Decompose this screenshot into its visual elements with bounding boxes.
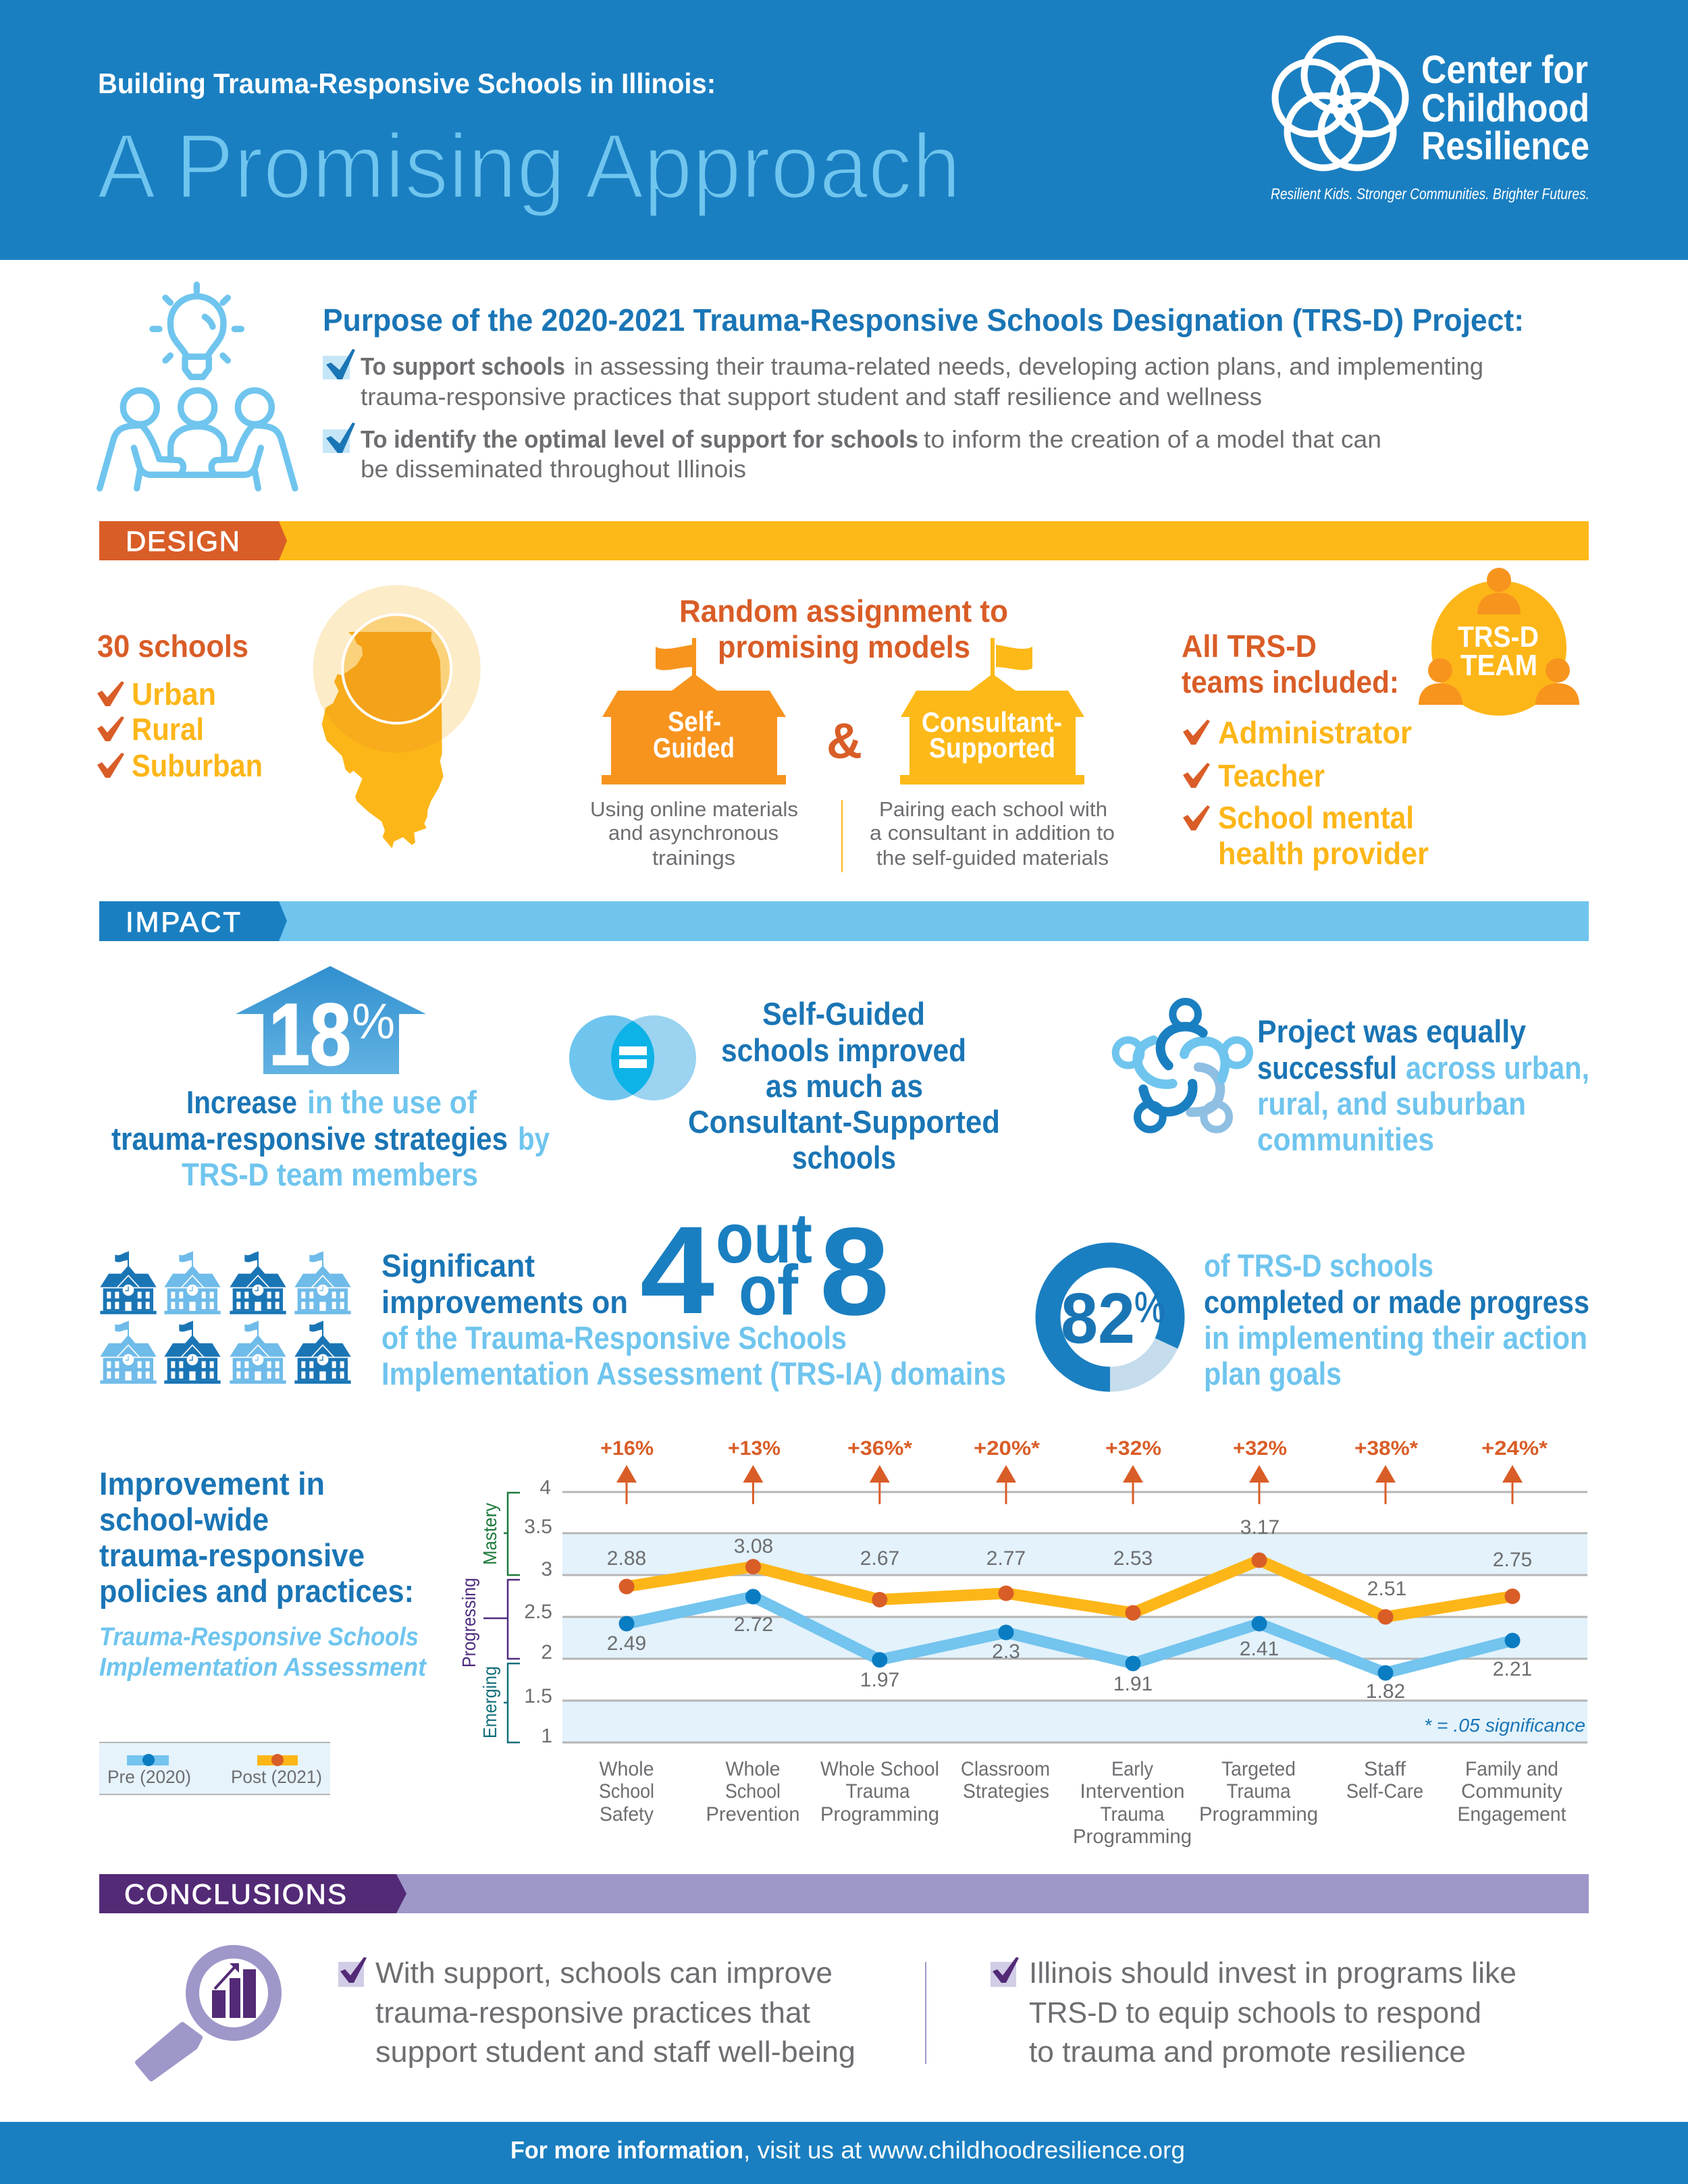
legend: Post (2021) bbox=[231, 1767, 322, 1787]
level brackets bbox=[483, 1493, 520, 1742]
x axis labels: Intervention bbox=[1080, 1780, 1184, 1803]
label: rural: Rural bbox=[132, 712, 204, 747]
icon: self-guided school bbox=[602, 638, 786, 784]
x axis labels: Safety bbox=[600, 1803, 654, 1826]
y axis labels bbox=[524, 1476, 552, 1747]
x axis labels: School bbox=[599, 1780, 654, 1803]
big stat: 4 out of 8: of bbox=[739, 1251, 799, 1330]
icon: consultant-supported school bbox=[900, 638, 1084, 784]
label: emerging: Emerging bbox=[479, 1666, 500, 1738]
x axis labels: Trauma bbox=[1101, 1803, 1165, 1826]
heading: random assignment bbox=[679, 593, 1008, 664]
y axis labels: 3 bbox=[541, 1558, 552, 1580]
label: consultant-supported: Consultant- bbox=[922, 706, 1062, 738]
section bar: impact bbox=[99, 901, 1589, 941]
logo wordmark: Resilience bbox=[1421, 124, 1589, 168]
label: consultant-supported bbox=[922, 706, 1062, 764]
consultant-supported description: the self-guided materials bbox=[876, 846, 1109, 870]
markers: post bbox=[618, 1553, 1521, 1624]
big stat: 4 out of 8: out bbox=[716, 1199, 812, 1278]
subheading: assessment name: Trauma-Responsive Schools bbox=[99, 1623, 419, 1651]
text: of schools completed: completed or made progress bbox=[1204, 1284, 1589, 1320]
heading: random assignment: Random assignment to bbox=[679, 593, 1008, 629]
purpose heading: Purpose of the 2020-2021 Trauma-Responsive Schools Designation (TRS-D) Project: bbox=[323, 302, 1524, 338]
icon: lightbulb over team meeting bbox=[100, 285, 295, 488]
panel: purpose bbox=[100, 285, 1524, 488]
data labels: pre bbox=[607, 1614, 1532, 1703]
text: project equally successful: Project was equally bbox=[1257, 1013, 1526, 1049]
label: mastery: Mastery bbox=[479, 1503, 500, 1565]
percent change labels: +38%* bbox=[1354, 1437, 1418, 1460]
icon: TRS-D team circle: TEAM bbox=[1460, 649, 1537, 682]
panel: self-guided equals consultant-supported bbox=[569, 996, 1000, 1175]
x axis labels: Engagement bbox=[1457, 1803, 1566, 1826]
x axis labels: Staff bbox=[1364, 1758, 1406, 1780]
x axis labels: Whole School bbox=[820, 1758, 939, 1780]
icon: grid of eight schools bbox=[100, 1252, 351, 1384]
conclusion 1 text: support student and staff well-being bbox=[375, 2035, 855, 2069]
footer text bbox=[510, 2136, 1185, 2164]
text: significant improvements: improvements on bbox=[381, 1284, 628, 1320]
icon: TRS-D team circle: TRS-D bbox=[1458, 620, 1539, 654]
icon: check urban bbox=[97, 681, 124, 706]
text: increase in use bbox=[111, 1084, 550, 1192]
x axis labels: Self-Care bbox=[1346, 1780, 1423, 1803]
heading: all teams: teams included: bbox=[1182, 664, 1399, 699]
x axis labels: Family and bbox=[1465, 1758, 1558, 1780]
logo: five overlapping circles bbox=[1275, 39, 1406, 167]
panel: equally successful bbox=[1115, 1001, 1589, 1157]
label: school mental health provider: School mental bbox=[1218, 800, 1414, 835]
data labels: post bbox=[607, 1516, 1532, 1600]
label: progressing: Progressing bbox=[458, 1578, 479, 1668]
text: of schools completed: in implementing their action bbox=[1204, 1320, 1587, 1356]
series: post 2021 bbox=[627, 1560, 1512, 1617]
ampersand: & bbox=[826, 713, 862, 769]
icon: check suburban bbox=[97, 753, 124, 778]
big stat: 4 out of 8: 4 bbox=[640, 1201, 714, 1340]
conclusion 1 text: With support, schools can improve bbox=[375, 1956, 833, 1990]
x axis labels: Classroom bbox=[961, 1758, 1050, 1780]
bullet 2 text: be disseminated throughout Illinois bbox=[361, 455, 746, 483]
percent change labels: +36%* bbox=[847, 1437, 912, 1460]
data labels: post: 3.08 bbox=[734, 1535, 773, 1557]
percent change labels: +16% bbox=[600, 1437, 654, 1460]
panel: 30 schools bbox=[97, 629, 263, 783]
text: self-guided improved bbox=[688, 996, 1000, 1175]
icon: magnifying glass with bar chart bbox=[138, 1952, 275, 2079]
text: increase in use: trauma-responsive strategies bbox=[111, 1121, 508, 1156]
consultant-supported description bbox=[870, 797, 1115, 870]
markers: pre bbox=[618, 1589, 1521, 1681]
icon: TRS-D team circle bbox=[1419, 568, 1579, 716]
conclusion 2 text: Illinois should invest in programs like bbox=[1029, 1956, 1516, 1990]
percent change labels: +13% bbox=[728, 1437, 781, 1460]
logo wordmark: Center for bbox=[1421, 48, 1588, 92]
percent change labels: +24%* bbox=[1481, 1437, 1548, 1460]
logo wordmark bbox=[1421, 48, 1589, 168]
legend: Pre (2020) bbox=[107, 1767, 191, 1787]
text: of the assessment domains bbox=[381, 1320, 1006, 1391]
panel: TRS-D teams bbox=[1182, 568, 1579, 871]
series: pre 2020 bbox=[627, 1597, 1512, 1673]
x axis labels: Community bbox=[1461, 1780, 1562, 1803]
bullet 2 text: To identify the optimal level of support for schools bbox=[361, 425, 918, 453]
label: urban: Urban bbox=[132, 676, 216, 712]
bullet 1 text: To support schools bbox=[361, 352, 565, 380]
heading: random assignment: promising models bbox=[718, 629, 970, 664]
text: self-guided improved: schools improved bbox=[721, 1032, 966, 1068]
icon: up arrow with 18%: 18 bbox=[269, 985, 351, 1084]
icon: check teacher bbox=[1183, 763, 1210, 788]
text: significant improvements: Significant bbox=[381, 1248, 535, 1283]
significance note: * = .05 significance bbox=[1424, 1715, 1585, 1736]
text: self-guided improved: schools bbox=[792, 1140, 896, 1175]
x axis labels: Targeted bbox=[1221, 1758, 1296, 1780]
data labels: pre: 2.72 bbox=[734, 1614, 773, 1636]
text: project equally successful: successful bbox=[1257, 1050, 1397, 1086]
consultant-supported description: Pairing each school with bbox=[879, 797, 1107, 821]
header banner bbox=[0, 0, 1688, 260]
panel: 4 out of 8 domains bbox=[100, 1199, 1006, 1391]
main title: A Promising Approach bbox=[97, 115, 961, 217]
logo tagline: Resilient Kids. Stronger Communities. Brighter Futures. bbox=[1271, 185, 1589, 203]
text: project equally successful: rural, and suburban bbox=[1257, 1086, 1526, 1121]
self-guided description: Using online materials bbox=[590, 797, 798, 821]
bullet 1 text: in assessing their trauma-related needs, developing action plans, and implementing bbox=[574, 352, 1483, 380]
bullet 1 text bbox=[361, 352, 1483, 410]
section bar: design bbox=[99, 521, 1589, 560]
text: increase in use: TRS-D team members bbox=[182, 1156, 478, 1192]
heading: all teams bbox=[1182, 629, 1399, 699]
section bar: impact: IMPACT bbox=[126, 906, 240, 938]
label: suburban: Suburban bbox=[132, 748, 263, 783]
data labels: post: 2.67 bbox=[860, 1547, 899, 1570]
data labels: pre: 2.41 bbox=[1240, 1638, 1279, 1660]
data labels: post: 2.51 bbox=[1367, 1578, 1406, 1600]
label: administrator: Administrator bbox=[1218, 715, 1412, 750]
x axis labels: Whole bbox=[600, 1758, 654, 1780]
data labels: pre: 1.91 bbox=[1113, 1673, 1153, 1695]
y axis labels: 1.5 bbox=[524, 1685, 552, 1707]
x axis labels: Programming bbox=[1073, 1826, 1192, 1848]
icon: up arrow with 18%: % bbox=[352, 993, 395, 1049]
text: self-guided improved: as much as bbox=[766, 1068, 923, 1104]
x axis labels: Prevention bbox=[706, 1803, 799, 1826]
icon: check box 2 bbox=[323, 423, 355, 453]
x axis labels: School bbox=[725, 1780, 781, 1803]
percent change labels bbox=[600, 1437, 1548, 1460]
text: self-guided improved: Consultant-Supported bbox=[688, 1104, 1000, 1140]
text: of the assessment domains: of the Trauma-Responsive Schools bbox=[381, 1320, 847, 1356]
icon: check box 1 bbox=[323, 349, 355, 379]
bullet 1 text: trauma-responsive practices that support student and staff resilience and wellness bbox=[361, 383, 1262, 410]
self-guided description: and asynchronous bbox=[608, 821, 779, 845]
y axis labels: 1 bbox=[541, 1725, 552, 1747]
subheading: assessment name: Implementation Assessment bbox=[99, 1653, 427, 1682]
y axis labels: 2 bbox=[541, 1641, 552, 1663]
big stat: 4 out of 8 bbox=[640, 1199, 889, 1341]
icon: check administrator bbox=[1183, 720, 1210, 745]
logo wordmark: Childhood bbox=[1421, 86, 1589, 130]
text: significant improvements bbox=[381, 1248, 628, 1320]
text: of schools completed bbox=[1204, 1248, 1589, 1391]
section bar: conclusions: CONCLUSIONS bbox=[124, 1878, 346, 1910]
panel: conclusions bbox=[138, 1952, 1516, 2079]
donut chart: 82% bbox=[1048, 1255, 1172, 1379]
data labels: pre: 2.49 bbox=[607, 1632, 646, 1655]
heading: improvement in school-wide policies: policies and practices: bbox=[99, 1573, 414, 1609]
label: consultant-supported: Supported bbox=[929, 732, 1055, 764]
header subtitle: Building Trauma-Responsive Schools in Illinois: bbox=[98, 68, 716, 99]
label: teacher: Teacher bbox=[1218, 758, 1325, 793]
x axis labels: Early bbox=[1111, 1758, 1153, 1780]
icon: interlocking people network bbox=[1115, 1001, 1249, 1129]
section bar: conclusions bbox=[99, 1874, 1589, 1913]
legend bbox=[99, 1742, 330, 1795]
text: self-guided improved: Self-Guided bbox=[762, 996, 925, 1032]
data labels: post: 2.75 bbox=[1493, 1549, 1532, 1571]
big stat: 4 out of 8: 8 bbox=[820, 1202, 889, 1341]
donut chart: 82%: % bbox=[1134, 1283, 1165, 1331]
percent change labels: +32% bbox=[1105, 1437, 1161, 1460]
label: self-guided: Guided bbox=[653, 732, 735, 764]
label: school mental health provider bbox=[1218, 800, 1429, 871]
x axis labels: Whole bbox=[725, 1758, 781, 1780]
text: project equally successful bbox=[1257, 1013, 1589, 1157]
conclusion 2 text bbox=[1029, 1956, 1516, 2069]
self-guided description: trainings bbox=[652, 846, 735, 870]
heading: 30 schools: 30 schools bbox=[97, 629, 248, 664]
heading: improvement in school-wide policies: school-wide bbox=[99, 1501, 269, 1537]
text: increase in use: in the use of bbox=[307, 1084, 477, 1120]
conclusion 1 text: trauma-responsive practices that bbox=[375, 1996, 810, 2029]
data labels: pre: 1.82 bbox=[1366, 1680, 1405, 1703]
chart bands bbox=[562, 1533, 1587, 1742]
donut chart: 82%: 82 bbox=[1061, 1279, 1135, 1358]
text: of schools completed: plan goals bbox=[1204, 1356, 1342, 1391]
panel: random assignment bbox=[590, 593, 1115, 872]
x axis labels bbox=[599, 1758, 1566, 1848]
arrows: improvement bbox=[616, 1465, 1523, 1504]
icon: check rural bbox=[97, 716, 124, 741]
percent change labels: +20%* bbox=[974, 1437, 1040, 1460]
text: increase in use: Increase bbox=[186, 1084, 297, 1120]
data labels: post: 2.88 bbox=[607, 1547, 646, 1570]
bullet 2 text: to inform the creation of a model that can bbox=[924, 425, 1381, 453]
panel: 82 percent bbox=[1048, 1248, 1589, 1391]
heading: improvement in school-wide policies: Improvement in bbox=[99, 1466, 325, 1501]
data labels: pre: 2.3 bbox=[992, 1641, 1020, 1663]
percent change labels: +32% bbox=[1233, 1437, 1287, 1460]
icon: venn diagram with equals bbox=[569, 1015, 696, 1100]
heading: improvement in school-wide policies bbox=[99, 1466, 414, 1609]
subheading: assessment name bbox=[99, 1623, 427, 1682]
conclusion 2 text: TRS-D to equip schools to respond bbox=[1029, 1996, 1481, 2029]
panel: 18 percent increase bbox=[111, 966, 550, 1192]
data labels: post: 2.53 bbox=[1113, 1547, 1153, 1570]
icon: check school mental health provider bbox=[1183, 805, 1210, 830]
y axis labels: 3.5 bbox=[524, 1516, 552, 1538]
self-guided description bbox=[590, 797, 798, 870]
icon: Illinois map with highlight circle bbox=[313, 585, 481, 849]
conclusion 1 text bbox=[375, 1956, 855, 2069]
icon: check box bbox=[338, 1957, 367, 1987]
x axis labels: Strategies bbox=[963, 1780, 1049, 1803]
text: project equally successful: across urban, bbox=[1406, 1050, 1589, 1086]
bullet 2 text bbox=[361, 425, 1381, 483]
icon: check box bbox=[991, 1957, 1019, 1987]
text: increase in use: by bbox=[518, 1121, 550, 1156]
text: of schools completed: of TRS-D schools bbox=[1204, 1248, 1433, 1283]
heading: improvement in school-wide policies: trauma-responsive bbox=[99, 1537, 365, 1573]
label: self-guided bbox=[653, 705, 735, 764]
text: of the assessment domains: Implementation Assessment (TRS-IA) domains bbox=[381, 1356, 1006, 1391]
footer text: , visit us at www.childhoodresilience.org bbox=[743, 2136, 1185, 2164]
heading: all teams: All TRS-D bbox=[1182, 629, 1317, 664]
data labels: post: 2.77 bbox=[986, 1547, 1026, 1570]
data labels: pre: 1.97 bbox=[860, 1669, 899, 1691]
x axis labels: Programming bbox=[820, 1803, 939, 1826]
y axis labels: 2.5 bbox=[524, 1601, 552, 1623]
footer text: For more information bbox=[510, 2136, 743, 2164]
text: project equally successful: communities bbox=[1257, 1121, 1434, 1157]
icon: up arrow with 18% bbox=[236, 966, 426, 1084]
x axis labels: Trauma bbox=[845, 1780, 910, 1803]
label: self-guided: Self- bbox=[668, 705, 721, 737]
consultant-supported description: a consultant in addition to bbox=[870, 821, 1115, 845]
x axis labels: Programming bbox=[1199, 1803, 1318, 1826]
line chart: pre and post scores bbox=[458, 1437, 1587, 1848]
label: school mental health provider: health provider bbox=[1218, 836, 1429, 871]
y axis labels: 4 bbox=[539, 1476, 551, 1499]
section bar: design: DESIGN bbox=[126, 525, 240, 557]
x axis labels: Trauma bbox=[1226, 1780, 1291, 1803]
footer bbox=[0, 2122, 1688, 2184]
data labels: pre: 2.21 bbox=[1493, 1658, 1532, 1680]
data labels: post: 3.17 bbox=[1240, 1516, 1280, 1539]
conclusion 2 text: to trauma and promote resilience bbox=[1029, 2035, 1466, 2069]
